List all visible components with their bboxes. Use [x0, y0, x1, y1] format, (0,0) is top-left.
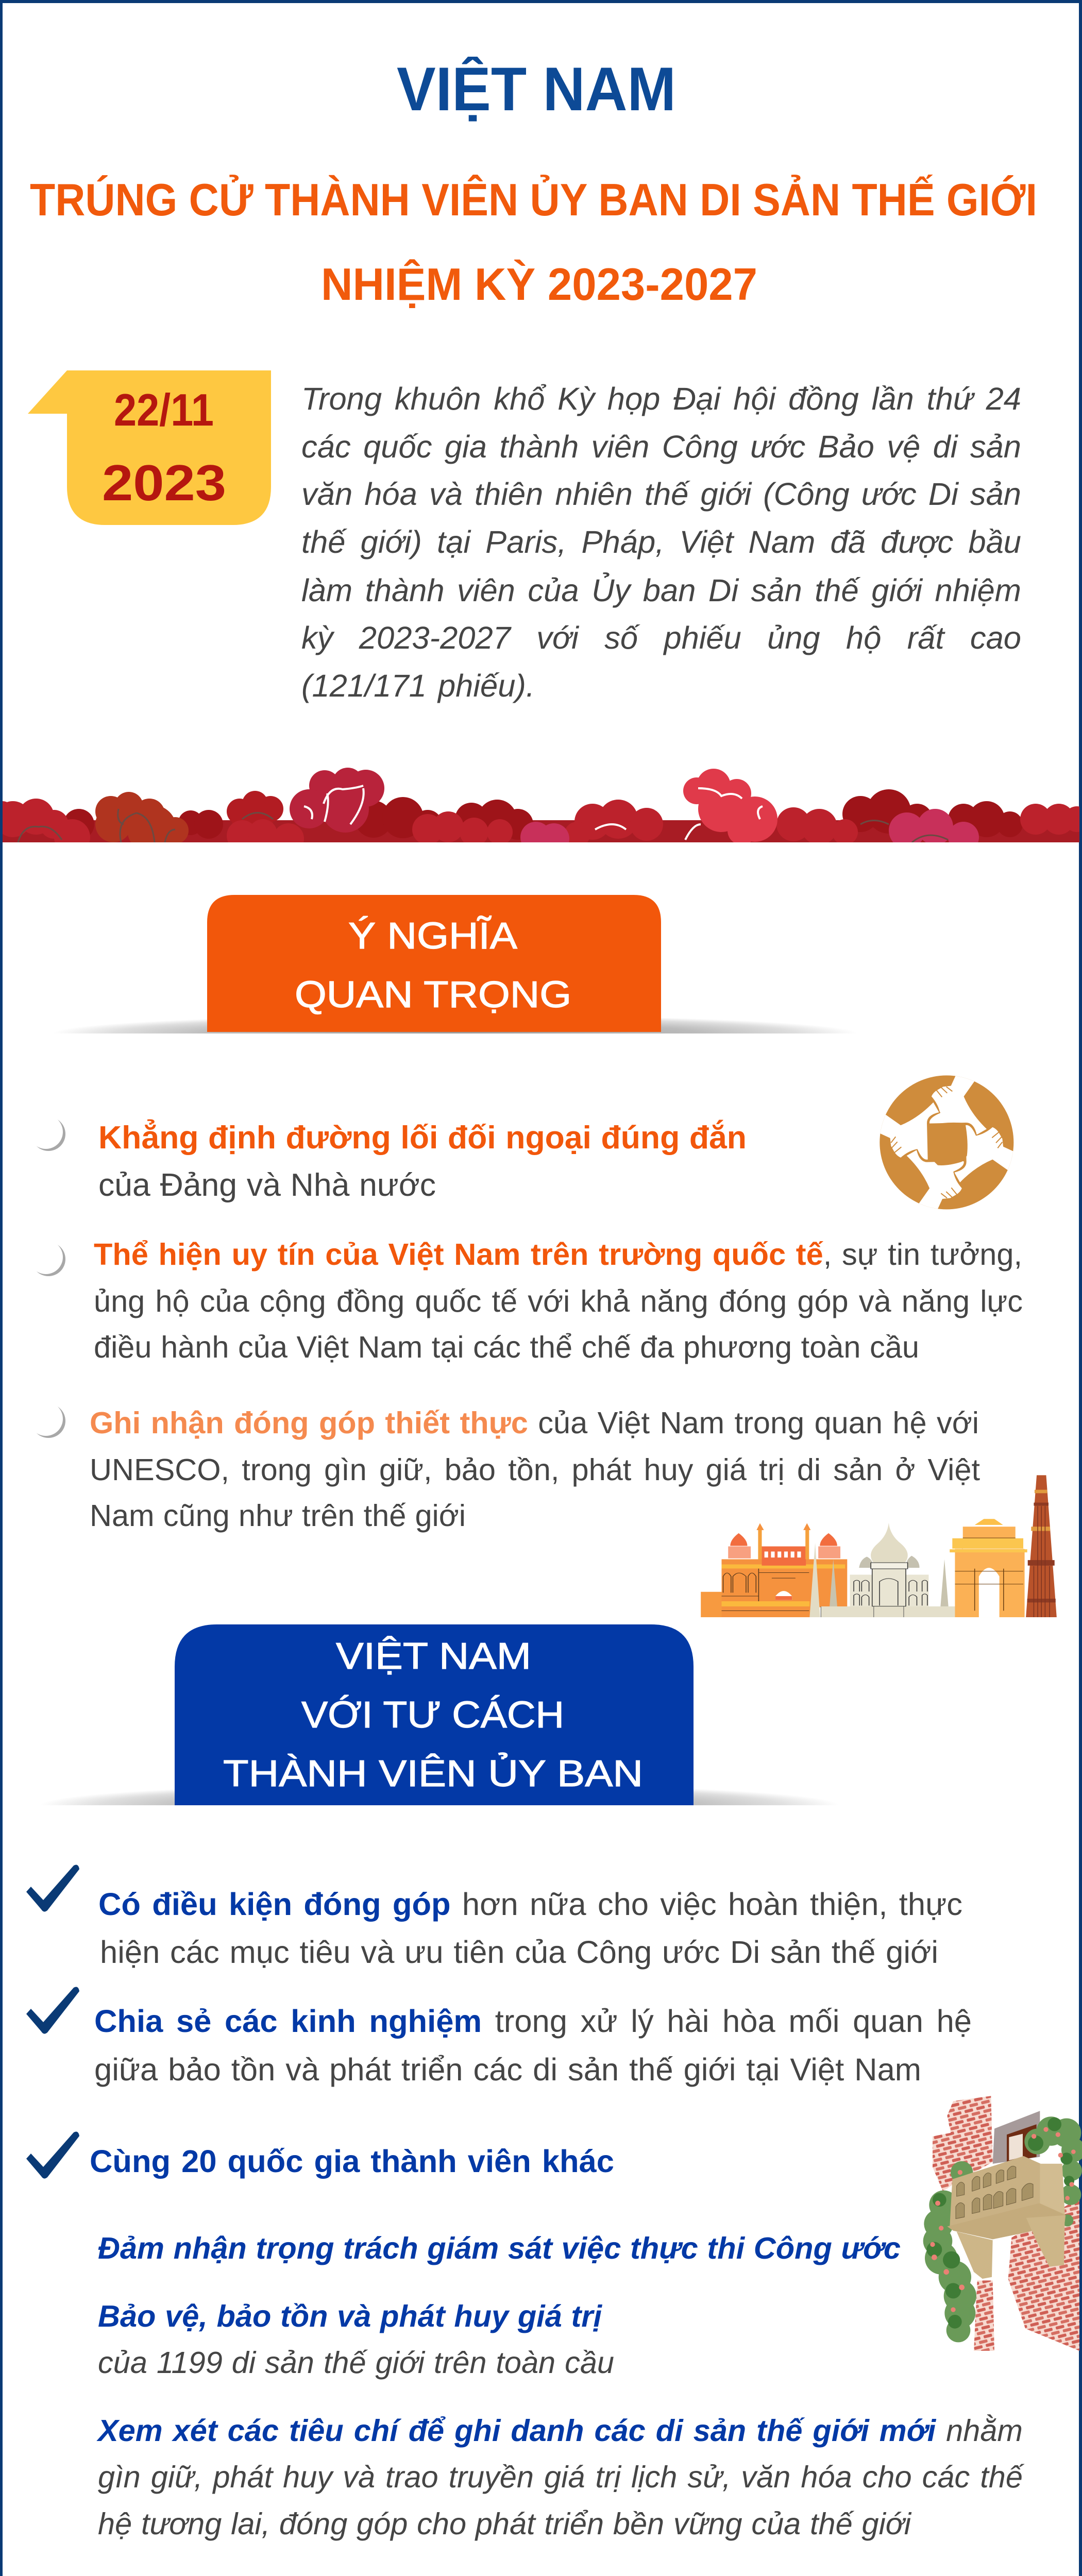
- intro paragraph: [301, 381, 1021, 704]
- date ribbon: 2023: [102, 454, 226, 511]
- significance item 2: điều hành của Việt Nam tại các thể chế đa phương toàn cầu: [94, 1330, 919, 1364]
- decorative red clouds band: [3, 768, 1079, 842]
- heading shadow: significance: [68, 1018, 842, 1033]
- committee tasks text: Đảm nhận trọng trách giám sát việc thực thi Công ước: [98, 2231, 901, 2265]
- committee tasks text: Xem xét các tiêu chí để ghi danh các di sản thế giới mới nhằm: [98, 2413, 1023, 2448]
- member item 1: hiện các mục tiêu và ưu tiên của Công ước Di sản thế giới: [100, 1935, 938, 1970]
- heading: member role: VỚI TƯ CÁCH: [301, 1694, 564, 1736]
- illustration: balcony with bricks and flowers: [923, 2096, 1082, 2351]
- date ribbon: [28, 370, 271, 525]
- member item 2: Chia sẻ các kinh nghiệm trong xử lý hài hòa mối quan hệ: [94, 2004, 972, 2039]
- heading: member role: THÀNH VIÊN ỦY BAN: [223, 1753, 643, 1794]
- member item 2: giữa bảo tồn và phát triển các di sản thế giới tại Việt Nam: [94, 2052, 921, 2088]
- significance item 3: Ghi nhận đóng góp thiết thực của Việt Nam trong quan hệ với: [90, 1405, 979, 1440]
- member item 2: [94, 2004, 972, 2088]
- heading: significance: [207, 895, 661, 1032]
- member item 3 heading: Cùng 20 quốc gia thành viên khác: [90, 2144, 614, 2179]
- intro paragraph: thế giới) tại Paris, Pháp, Việt Nam đã được bầu: [301, 524, 1021, 560]
- heading: significance: QUAN TRỌNG: [295, 974, 571, 1015]
- significance item 3: Nam cũng như trên thế giới: [90, 1498, 466, 1533]
- bullet 3: [37, 1406, 65, 1438]
- committee tasks text: hệ tương lai, đóng góp cho phát triển bền vững của thế giới: [98, 2506, 911, 2541]
- committee tasks text: của 1199 di sản thế giới trên toàn cầu: [98, 2345, 614, 2380]
- intro paragraph: các quốc gia thành viên Công ước Bảo vệ di sản: [301, 429, 1021, 465]
- heading: significance: Ý NGHĨA: [348, 916, 517, 957]
- date ribbon: 22/11: [114, 384, 214, 435]
- significance item 3: UNESCO, trong gìn giữ, bảo tồn, phát huy giá trị di sản ở Việt: [90, 1452, 980, 1487]
- icon: check mark 2: [26, 1987, 79, 2034]
- bullet 1: [37, 1120, 65, 1151]
- significance item 1: [98, 1119, 747, 1203]
- significance item 2: ủng hộ của cộng đồng quốc tế với khả năng đóng góp và năng lực: [94, 1284, 1023, 1318]
- title: VIỆT NAM: [397, 57, 676, 124]
- intro paragraph: kỳ 2023-2027 với số phiếu ủng hộ rất cao: [301, 620, 1021, 656]
- significance item 3: [90, 1405, 980, 1533]
- committee tasks text: Bảo vệ, bảo tồn và phát huy giá trị: [98, 2299, 602, 2333]
- icon: four joined hands: [880, 1075, 1014, 1210]
- significance item 1: Khẳng định đường lối đối ngoại đúng đắn: [98, 1120, 747, 1156]
- bullet 2: [37, 1245, 65, 1276]
- significance item 2: [94, 1237, 1023, 1364]
- significance item 1: của Đảng và Nhà nước: [98, 1167, 436, 1203]
- intro paragraph: làm thành viên của Ủy ban Di sản thế giới nhiệm: [301, 573, 1021, 608]
- intro paragraph: Trong khuôn khổ Kỳ họp Đại hội đồng lần thứ 24: [301, 381, 1021, 417]
- subtitle line 2: NHIỆM KỲ 2023-2027: [321, 259, 757, 310]
- committee tasks text: gìn giữ, phát huy và trao truyền giá trị lịch sử, văn hóa cho các thế: [98, 2460, 1023, 2494]
- heading: member role: [175, 1624, 694, 1805]
- member item 1: Có điều kiện đóng góp hơn nữa cho việc hoàn thiện, thực: [98, 1887, 962, 1922]
- icon: check mark 3: [26, 2132, 79, 2179]
- illustration: heritage monuments skyline: [701, 1475, 1057, 1617]
- heading shadow: member role: [55, 1790, 824, 1805]
- intro paragraph: văn hóa và thiên nhiên thế giới (Công ước Di sản: [301, 477, 1021, 512]
- member item 1: [98, 1887, 962, 1970]
- intro paragraph: (121/171 phiếu).: [301, 668, 535, 704]
- committee tasks text: [98, 2231, 1025, 2550]
- icon: check mark 1: [26, 1865, 79, 1912]
- heading: member role: VIỆT NAM: [336, 1636, 531, 1677]
- significance item 2: Thể hiện uy tín của Việt Nam trên trường quốc tế, sự tin tưởng,: [94, 1237, 1022, 1272]
